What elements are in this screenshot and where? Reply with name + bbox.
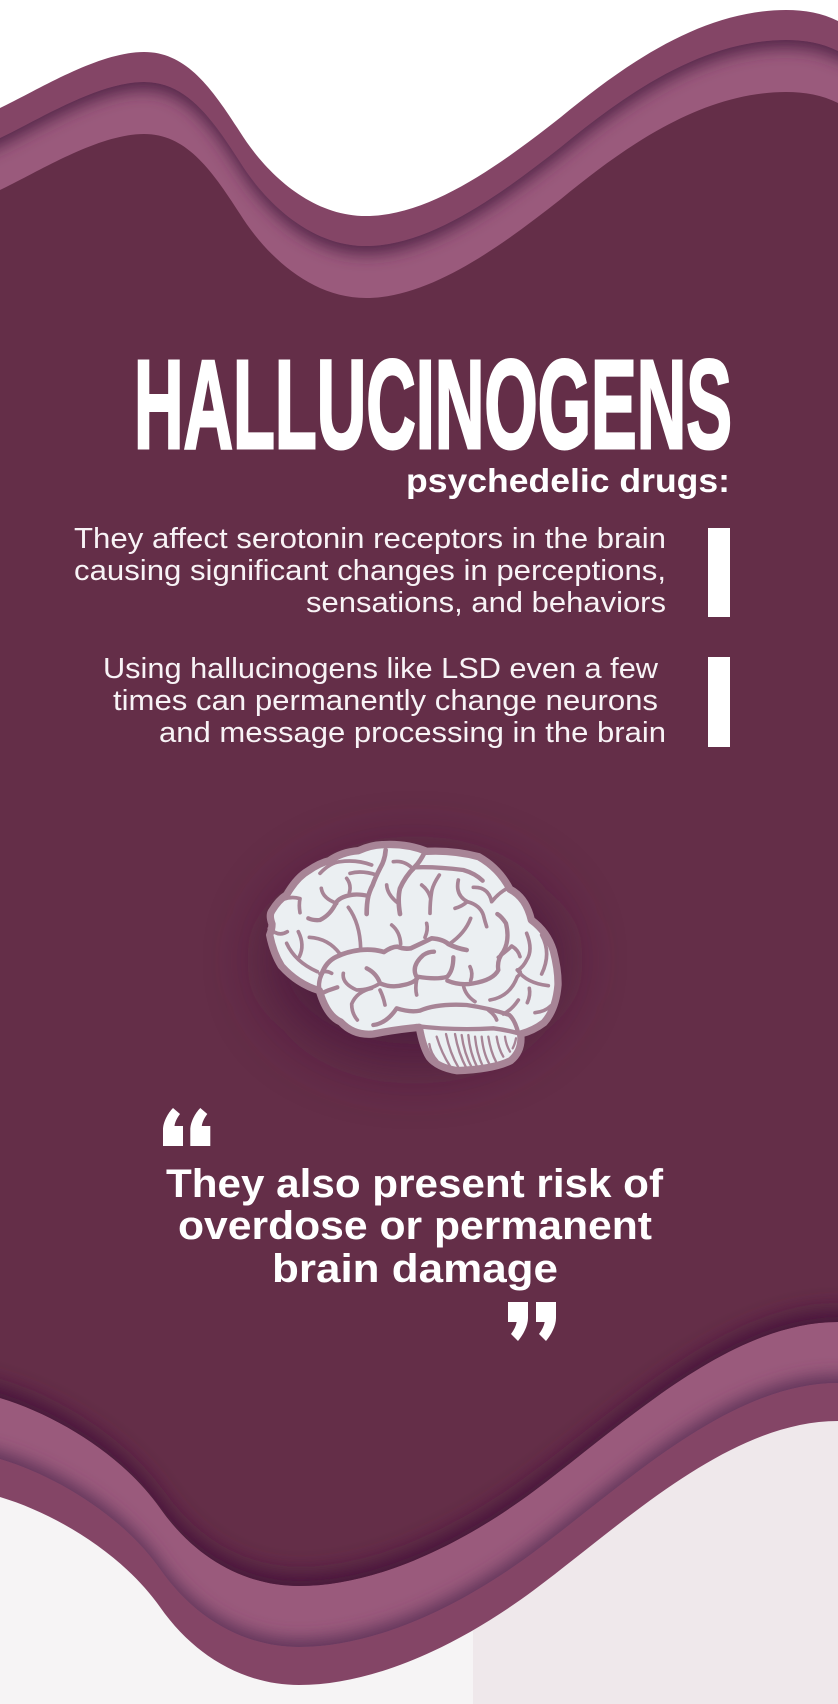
- quote text: [166, 1162, 664, 1291]
- subtitle: psychedelic drugs:: [406, 462, 730, 499]
- accent bar 2: [708, 657, 730, 747]
- brain folds: [269, 850, 551, 1033]
- text block: neurons: [103, 653, 666, 749]
- text block: neurons: and message processing in the brain: [159, 717, 666, 749]
- quote text: brain damage: [272, 1247, 558, 1291]
- quote text: They also present risk of: [166, 1162, 664, 1206]
- brain silhouette: [270, 844, 558, 1071]
- bottom wave layers: [0, 1082, 838, 1685]
- text block: neurons: times can permanently change neurons: [113, 685, 658, 717]
- top wave layers: [0, 10, 838, 901]
- accent bar 1: [708, 528, 730, 617]
- text block: serotonin: They affect serotonin receptors in the brain: [74, 523, 666, 555]
- bottom right light panel: [473, 1300, 838, 1704]
- quote text: overdose or permanent: [178, 1204, 652, 1248]
- brain shadow: [265, 855, 565, 1065]
- icon: closing quote: [508, 1302, 556, 1341]
- text block: neurons: Using hallucinogens like LSD even a few: [103, 653, 658, 685]
- icon: brain: [269, 844, 558, 1071]
- text block: serotonin: causing significant changes in perceptions,: [74, 555, 666, 587]
- cerebellum lines: [429, 1034, 516, 1069]
- text block: serotonin: sensations, and behaviors: [306, 587, 666, 619]
- text block: serotonin: [74, 523, 666, 619]
- icon: opening quote: [163, 1108, 210, 1146]
- bottom left light panel: [0, 1300, 473, 1704]
